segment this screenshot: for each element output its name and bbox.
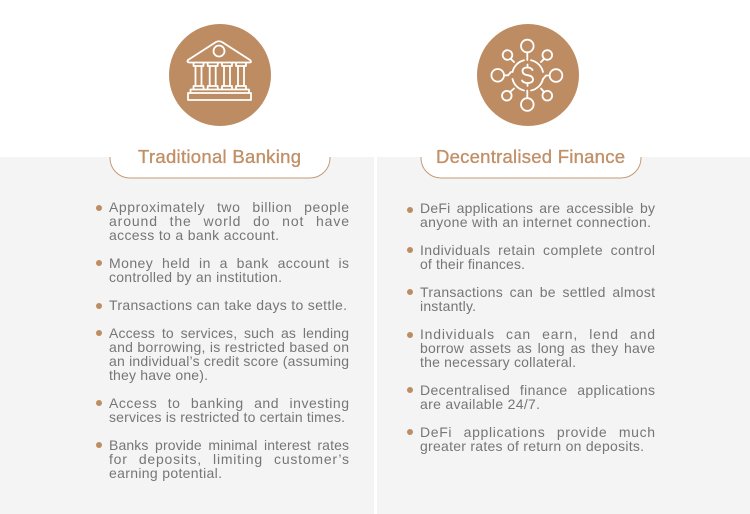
bullet: bank account access: Approximately two billion people (109, 199, 349, 215)
bullet: bank account access: around the world do not have (109, 213, 349, 229)
bullet: always available: are available 24/7. (420, 396, 540, 412)
bullet: instant settlement (407, 284, 655, 314)
bullet: restricted times: services is restricted to certain times. (109, 409, 345, 425)
bullet: accessibility (407, 200, 655, 230)
bullet: earn and lend: Individuals can earn, lend and (420, 326, 655, 342)
bullet: settlement time: Transactions can take days to settle. (109, 297, 347, 313)
bullet: restricted times: Access to banking and investing (109, 395, 349, 411)
bullet: complete control: of their finances. (420, 256, 525, 272)
bullet: accessibility: DeFi applications are accessible by (420, 200, 655, 216)
heading tab: Traditional Banking (110, 146, 330, 178)
bullet: interest rates (96, 437, 349, 481)
bullet: interest rates: for deposits, limiting customer’s (109, 451, 349, 467)
bullet: institution control (96, 255, 349, 285)
panel: traditional banking list (96, 199, 349, 481)
icon: decentralised network with dollar (477, 24, 579, 126)
heading tab: Decentralised Finance: Decentralised Finance (436, 146, 625, 167)
bullet: always available: Decentralised finance applications (420, 382, 655, 398)
bullet: instant settlement: instantly. (420, 298, 476, 314)
bullet: earn and lend: the necessary collateral. (420, 354, 576, 370)
bullet: earn and lend: borrow assets as long as they have (420, 340, 655, 356)
bullet: complete control (407, 242, 655, 272)
bullet: credit score (96, 325, 349, 383)
bullet: interest rates: earning potential. (109, 465, 222, 481)
bullet: rates of return: DeFi applications provide much (420, 424, 655, 440)
bullet: instant settlement: Transactions can be settled almost (420, 284, 655, 300)
bullet: complete control: Individuals retain complete control (420, 242, 655, 258)
bullet: institution control: controlled by an institution. (109, 269, 282, 285)
bullet: bank account access (96, 199, 349, 243)
bullet: institution control: Money held in a bank account is (109, 255, 349, 271)
bullet: credit score: an individual’s credit score (assuming (109, 353, 349, 369)
bullet: credit score: and borrowing, is restricted based on (109, 339, 349, 355)
bullet: restricted times (96, 395, 349, 425)
bullet: interest rates: Banks provide minimal interest rates (109, 437, 349, 453)
bullet: always available (407, 382, 655, 412)
bullet: credit score: they have one). (109, 367, 208, 383)
bullet: credit score: Access to services, such as lending (109, 325, 349, 341)
bullet: earn and lend (407, 326, 655, 370)
bullet: accessibility: anyone with an internet connection. (420, 214, 651, 230)
icon: bank building (169, 24, 271, 126)
heading tab: Decentralised Finance (421, 146, 641, 178)
bullet: rates of return (407, 424, 655, 454)
bullet: rates of return: greater rates of return on deposits. (420, 438, 644, 454)
heading tab: Traditional Banking: Traditional Banking (138, 146, 301, 167)
bullet: bank account access: access to a bank account. (109, 227, 279, 243)
panel: decentralised finance list (407, 200, 655, 454)
